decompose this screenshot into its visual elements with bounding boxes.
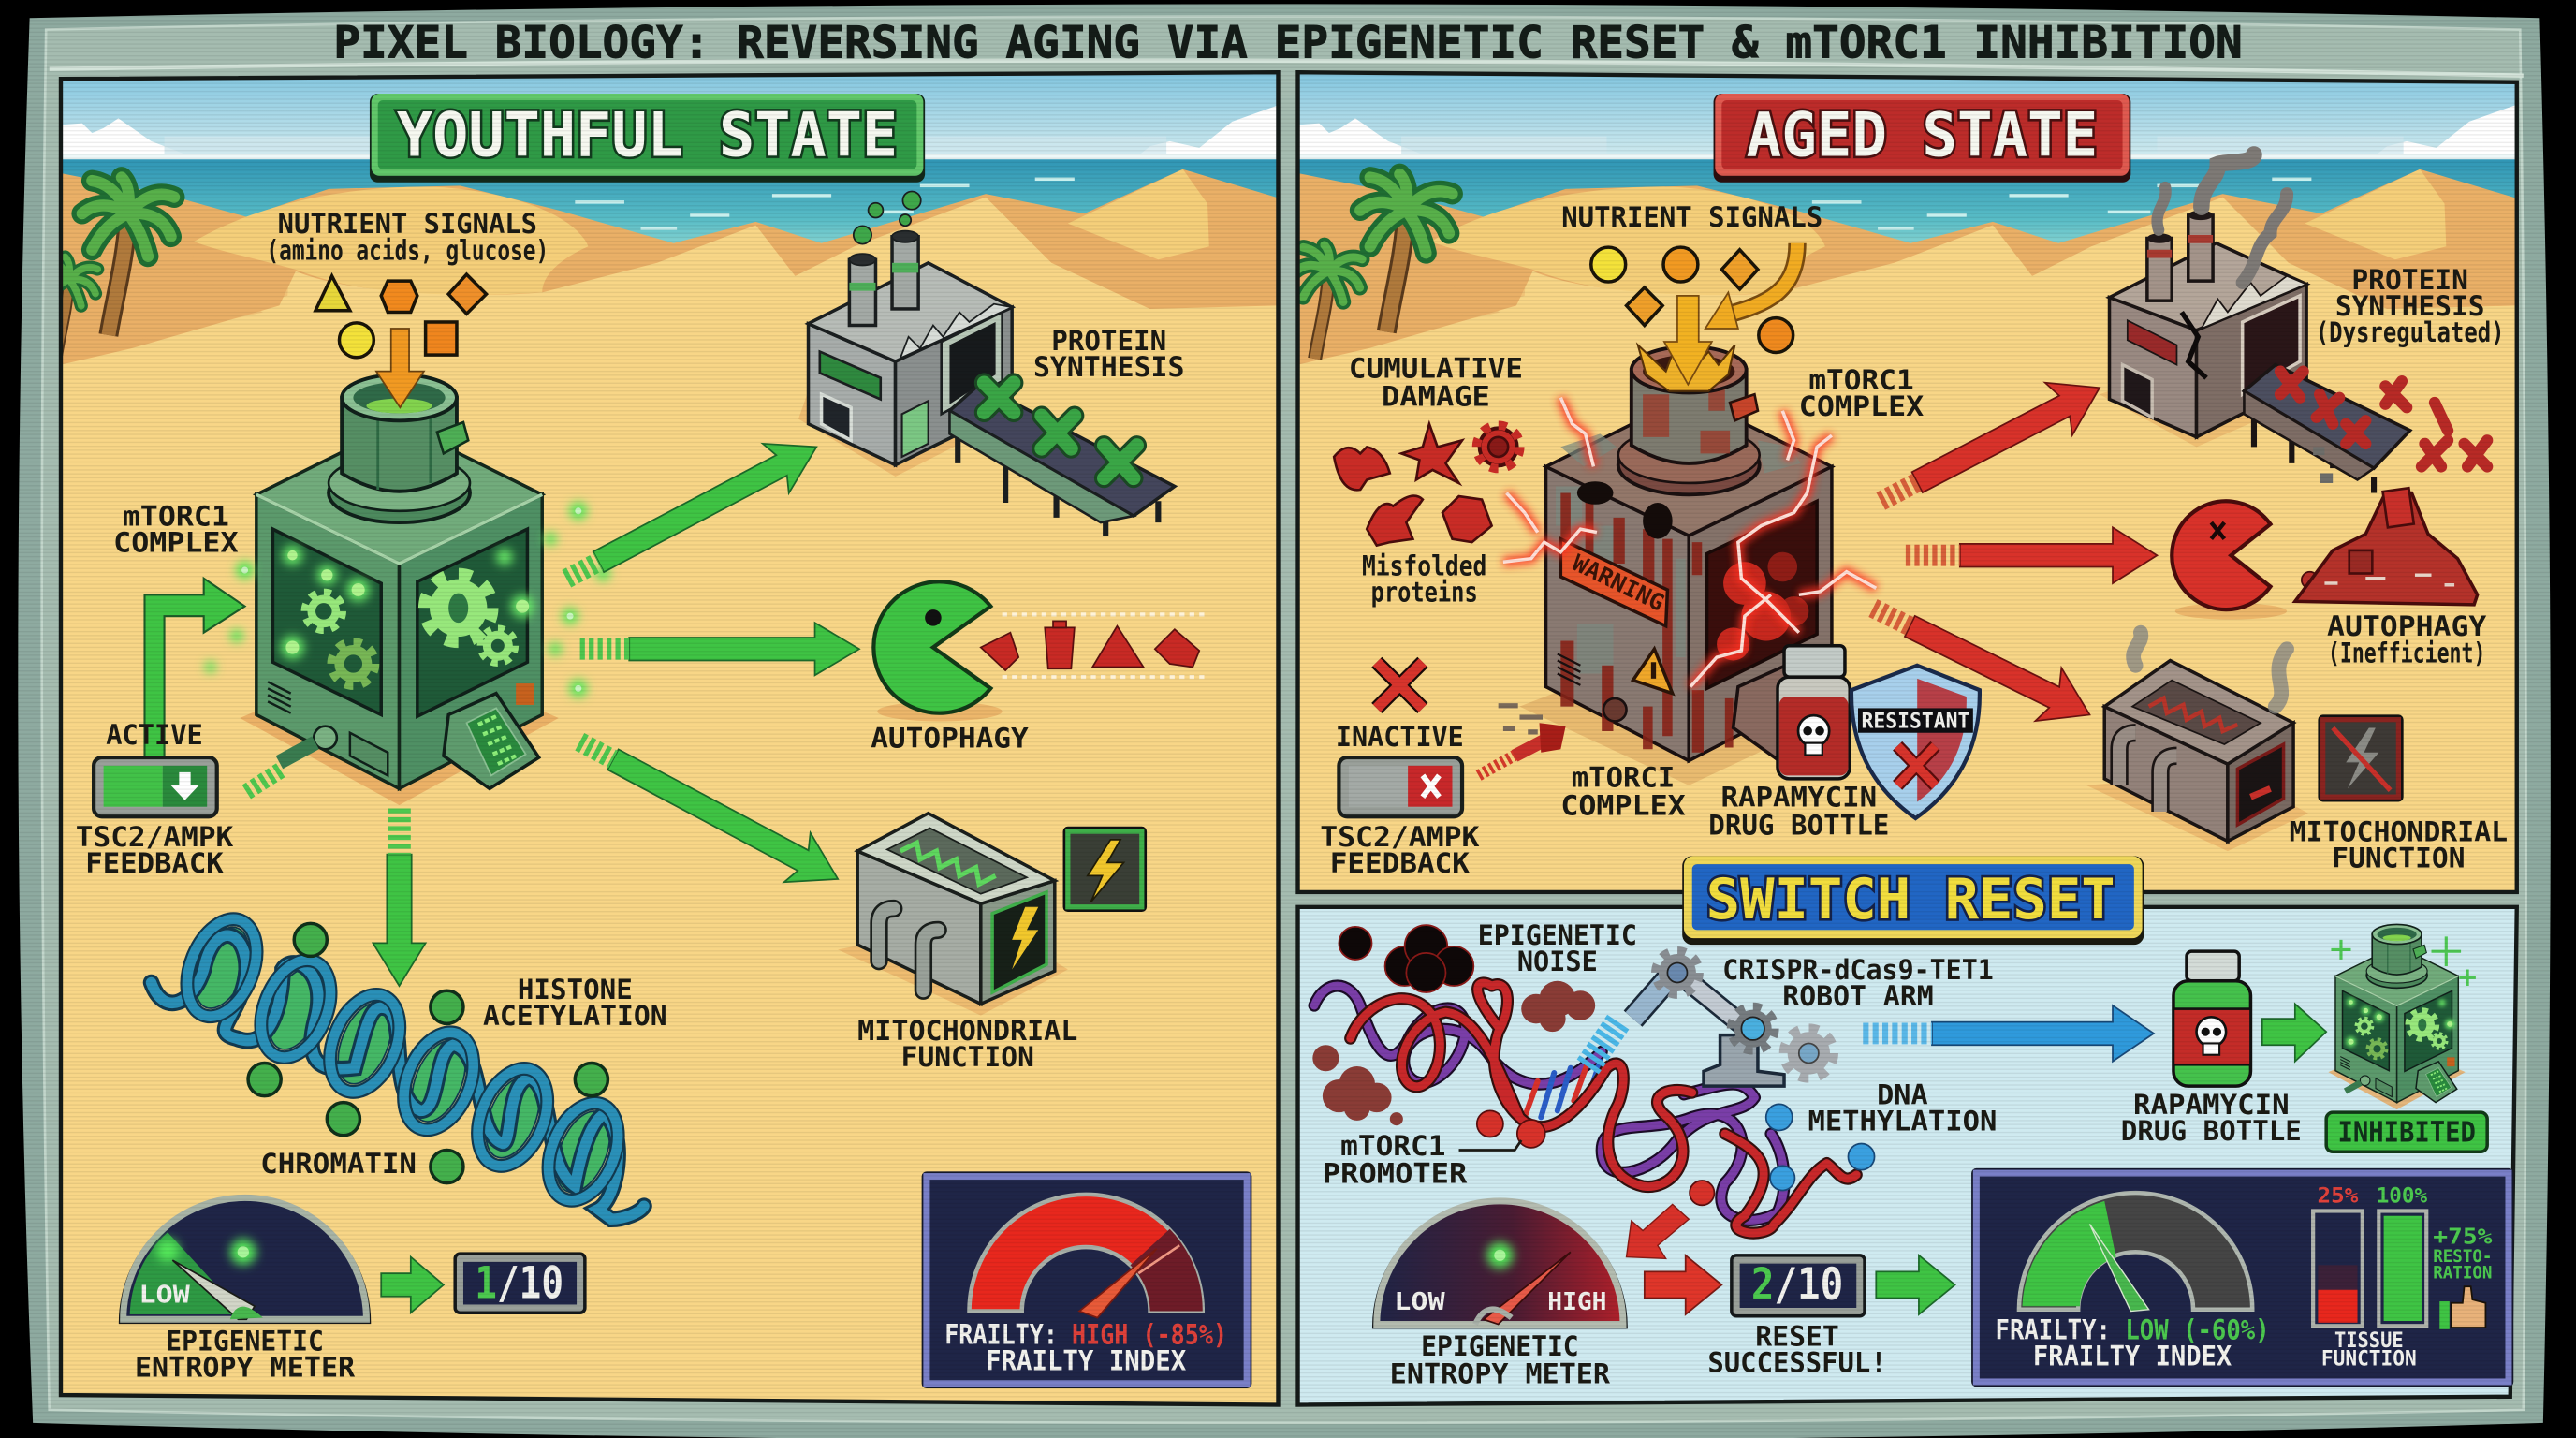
factory: damaged xyxy=(2100,154,2487,493)
label: TSC2/AMPK feedback: FEEDBACK xyxy=(85,847,224,879)
label: mTORC1 complex: mTORC1 xyxy=(123,501,229,533)
arrow: orange nutrient input xyxy=(376,329,424,407)
label: mTORC1 complex bottom: COMPLEX xyxy=(1560,789,1686,821)
keypad xyxy=(444,694,539,788)
frailty panel: high: FRAILTY INDEX xyxy=(986,1345,1187,1377)
icon: energy bolt xyxy=(1064,829,1145,910)
frailty panel: low with tissue function: FRAILTY INDEX xyxy=(2033,1340,2232,1372)
label: mTORC1 complex top xyxy=(1799,364,1925,422)
label: rapamycin drug bottle: DRUG BOTTLE xyxy=(1708,810,1889,842)
arrow: to protein synthesis xyxy=(553,422,829,604)
label: histone acetylation xyxy=(483,974,667,1032)
label: autophagy: AUTOPHAGY xyxy=(871,723,1029,755)
arrow: yellow nutrient input xyxy=(1664,296,1712,385)
heading badge: aged state xyxy=(1714,94,2130,183)
pac-man: autophagy xyxy=(873,581,1204,721)
label: epigenetic noise: NOISE xyxy=(1517,946,1598,977)
label: DNA methylation: DNA xyxy=(1877,1078,1928,1110)
chromatin coil xyxy=(152,909,644,1219)
mTORC1 machine (damaged) xyxy=(1519,345,1856,785)
vents and door xyxy=(268,682,388,775)
mitochondrial machine (damaged) xyxy=(2086,633,2308,851)
panel: aged state xyxy=(1295,70,2519,895)
gauge: epigenetic entropy high: HIGH xyxy=(1547,1287,1606,1315)
panel: switch reset xyxy=(1298,856,2517,1405)
label: mTORC1 complex xyxy=(113,501,239,559)
label: mTORC1 complex top: mTORC1 xyxy=(1808,364,1914,396)
toggle: active xyxy=(94,757,217,816)
label: autophagy inefficient: (Inefficient) xyxy=(2328,637,2485,668)
arrow: dysregulated protein synthesis xyxy=(1867,361,2114,527)
label: DNA methylation: METHYLATION xyxy=(1808,1105,1997,1137)
label: protein synthesis dysregulated: (Dysregulated) xyxy=(2316,316,2505,348)
label: rapamycin drug bottle: RAPAMYCIN xyxy=(1720,782,1877,814)
rapamycin bottle (green) xyxy=(2174,951,2250,1086)
tissue function bars: TISSUE xyxy=(2334,1329,2404,1353)
arrow: to mitochondrial function xyxy=(566,717,851,903)
label: DNA methylation xyxy=(1808,1078,1997,1137)
label: reset successful: RESET xyxy=(1755,1320,1839,1352)
epigenetic noise clouds xyxy=(1312,925,1595,1125)
label: CRISPR robot arm: CRISPR-dCas9-TET1 xyxy=(1722,954,1994,986)
label: nutrient signals xyxy=(266,208,549,266)
arrow: to autophagy xyxy=(580,623,859,675)
pile: unprocessed debris xyxy=(2295,488,2478,605)
stub arrow: feedback blocked xyxy=(1479,723,1566,775)
label: mTORC1 complex: COMPLEX xyxy=(113,527,239,559)
score 1/10: 1/10 xyxy=(475,1257,564,1309)
rapamycin bottle xyxy=(1778,646,1850,779)
icon: thumbs up xyxy=(2439,1286,2485,1329)
label: mTORC1 promoter: PROMOTER xyxy=(1323,1158,1468,1190)
tissue function bars: RESTO- xyxy=(2433,1247,2492,1267)
label: epigenetic entropy meter: ENTROPY METER xyxy=(135,1352,356,1384)
mitochondrial machine xyxy=(838,814,1068,1016)
label: histone acetylation: ACETYLATION xyxy=(483,1000,667,1032)
label: reset successful: SUCCESSFUL! xyxy=(1707,1346,1887,1378)
label: protein synthesis: PROTEIN xyxy=(1051,325,1166,357)
label: epigenetic noise: EPIGENETIC xyxy=(1478,919,1637,951)
icon: red X inactive xyxy=(1377,662,1423,708)
machine: inhibited xyxy=(2328,924,2466,1109)
label: chromatin: CHROMATIN xyxy=(260,1148,417,1180)
heading badge: switch reset: SWITCH RESET xyxy=(1706,868,2115,932)
mTORC1 machine (damaged): WARNING xyxy=(1568,549,1669,617)
label: epigenetic entropy meter: EPIGENETIC xyxy=(1421,1330,1579,1362)
debris xyxy=(1499,703,1543,734)
heading badge: switch reset xyxy=(1682,856,2144,945)
shield: resistant: RESISTANT xyxy=(1862,710,1969,733)
score 2/10 xyxy=(1732,1255,1865,1316)
label: mitochondrial function xyxy=(857,1015,1077,1073)
mTORC1 machine (active) xyxy=(240,374,559,805)
label: rapamycin drug bottle xyxy=(1708,782,1889,842)
label: mitochondrial function: MITOCHONDRIAL xyxy=(2290,816,2508,848)
label: mTORC1 complex bottom: mTORCI xyxy=(1572,762,1675,794)
label: mitochondrial function: FUNCTION xyxy=(901,1041,1034,1073)
tissue function bars: 100% xyxy=(2377,1185,2428,1209)
label: misfolded proteins: Misfolded xyxy=(1362,550,1486,581)
label: epigenetic noise xyxy=(1478,919,1637,977)
arrow: to score xyxy=(381,1257,444,1313)
label: TSC2/AMPK feedback: TSC2/AMPK xyxy=(1320,821,1480,853)
label: epigenetic entropy meter xyxy=(135,1326,356,1384)
label: histone acetylation: HISTONE xyxy=(518,974,633,1005)
label: TSC2/AMPK feedback xyxy=(76,821,234,879)
label: CRISPR robot arm xyxy=(1722,954,1994,1012)
glowing particles xyxy=(205,502,610,792)
shield: resistant xyxy=(1852,666,1980,818)
label: TSC2/AMPK feedback: FEEDBACK xyxy=(1330,847,1471,879)
lightning sparks xyxy=(1503,398,1876,687)
label: mTORC1 complex bottom xyxy=(1560,762,1686,821)
label: TSC2/AMPK feedback: TSC2/AMPK xyxy=(76,821,234,853)
label: misfolded proteins: proteins xyxy=(1371,576,1478,608)
panel: youthful state xyxy=(40,66,1298,1413)
gauge: epigenetic entropy low: LOW xyxy=(139,1281,191,1309)
conveyor xyxy=(2254,419,2374,493)
frailty panel: high: FRAILTY: HIGH (-85%) xyxy=(944,1319,1227,1351)
arrow: bent TSC2 feedback xyxy=(145,579,245,759)
label: protein synthesis xyxy=(1033,325,1184,383)
label: mTORC1 complex top: COMPLEX xyxy=(1799,390,1925,422)
label: inactive: INACTIVE xyxy=(1336,721,1464,753)
toggle: inactive xyxy=(1339,757,1462,816)
frailty panel: low with tissue function xyxy=(1971,1168,2513,1387)
arrow: curved nutrient input xyxy=(1705,243,1797,329)
factory: protein synthesis xyxy=(798,191,1175,536)
label: mitochondrial function: FUNCTION xyxy=(2332,843,2465,874)
score 1/10 xyxy=(455,1254,585,1313)
tissue function bars: RATION xyxy=(2433,1263,2492,1283)
label: CRISPR robot arm: ROBOT ARM xyxy=(1782,980,1934,1012)
arrow: blue to rapamycin xyxy=(1863,1005,2154,1062)
icons: misfolded proteins xyxy=(1334,424,1520,546)
label: reset successful xyxy=(1707,1320,1887,1378)
label: protein synthesis dysregulated: SYNTHESIS xyxy=(2335,290,2485,322)
tissue function bars: 25% xyxy=(2318,1185,2359,1209)
conveyor xyxy=(958,435,1158,536)
tissue function bars: FUNCTION xyxy=(2321,1347,2417,1371)
arrow: mitochondria failing xyxy=(1860,581,2102,741)
label: TSC2/AMPK feedback xyxy=(1320,821,1480,879)
label: epigenetic entropy meter xyxy=(1390,1330,1611,1390)
label: autophagy inefficient xyxy=(2327,610,2487,668)
frailty panel: low with tissue function: FRAILTY: LOW (-60%) xyxy=(1996,1313,2270,1345)
label: mTORC1 promoter: mTORC1 xyxy=(1340,1130,1445,1162)
score 2/10: 2/10 xyxy=(1751,1259,1843,1311)
status: inhibited: INHIBITED xyxy=(2337,1117,2476,1150)
label: cumulative damage: DAMAGE xyxy=(1382,380,1490,412)
label: misfolded proteins xyxy=(1362,550,1486,608)
cylinder xyxy=(1618,435,1760,494)
gauge: epigenetic entropy high xyxy=(1373,1199,1627,1328)
DNA tangle xyxy=(1314,983,1875,1233)
label: cumulative damage: CUMULATIVE xyxy=(1349,353,1523,385)
label: mitochondrial function xyxy=(2290,816,2508,874)
label: cumulative damage xyxy=(1349,353,1523,412)
label: nutrient signals: NUTRIENT SIGNALS xyxy=(1561,201,1822,233)
label: nutrient signals: (amino acids, glucose) xyxy=(266,234,549,266)
label: protein synthesis dysregulated: PROTEIN xyxy=(2351,264,2468,296)
arrow: diagonal red xyxy=(1627,1204,1689,1258)
label: nutrient signals: NUTRIENT SIGNALS xyxy=(278,208,537,240)
heading badge: aged state: AGED STATE xyxy=(1747,101,2098,171)
icon: failing energy xyxy=(2320,716,2402,800)
frailty panel: high xyxy=(922,1171,1251,1388)
label: protein synthesis dysregulated xyxy=(2316,264,2505,348)
gauge: epigenetic entropy high: LOW xyxy=(1394,1287,1445,1315)
label: autophagy inefficient: AUTOPHAGY xyxy=(2327,610,2487,642)
arrow: bottle to inhibited machine xyxy=(2262,1004,2326,1062)
arrow: to chromatin xyxy=(373,808,426,986)
label: epigenetic entropy meter: ENTROPY METER xyxy=(1390,1358,1611,1390)
label: active: ACTIVE xyxy=(106,719,203,751)
label: protein synthesis: SYNTHESIS xyxy=(1033,351,1184,383)
gauge: epigenetic entropy low xyxy=(120,1196,370,1323)
icons: nutrient shapes xyxy=(1591,247,1793,352)
leader: mTORC1 promoter xyxy=(1459,1140,1521,1151)
label: rapamycin drug bottle: DRUG BOTTLE xyxy=(2121,1115,2302,1147)
pac-man: damaged xyxy=(2172,501,2318,620)
label: epigenetic entropy meter: EPIGENETIC xyxy=(166,1326,324,1357)
robot arm xyxy=(1587,951,1834,1086)
heading badge: youthful state: YOUTHFUL STATE xyxy=(397,101,898,171)
frailty gauge xyxy=(2019,1193,2252,1312)
inhibited sparkles xyxy=(2331,936,2476,986)
tissue function bars: +75% xyxy=(2433,1225,2493,1250)
label: mTORC1 promoter xyxy=(1323,1130,1468,1190)
label: rapamycin drug bottle xyxy=(2121,1089,2302,1147)
cylinder xyxy=(329,463,470,522)
arrow: red to score xyxy=(1645,1255,1721,1314)
bottom console xyxy=(1734,666,1828,761)
arrow: green to frailty xyxy=(1876,1255,1955,1314)
label: rapamycin drug bottle: RAPAMYCIN xyxy=(2133,1089,2290,1121)
tissue function bars xyxy=(2313,1185,2493,1371)
title: PIXEL BIOLOGY: REVERSING AGING VIA EPIGENETIC RESET & mTORC1 INHIBITION xyxy=(333,17,2243,68)
arrow: inefficient autophagy xyxy=(1906,527,2157,583)
label: mitochondrial function: MITOCHONDRIAL xyxy=(857,1015,1077,1047)
icons: nutrient shapes xyxy=(315,274,487,358)
